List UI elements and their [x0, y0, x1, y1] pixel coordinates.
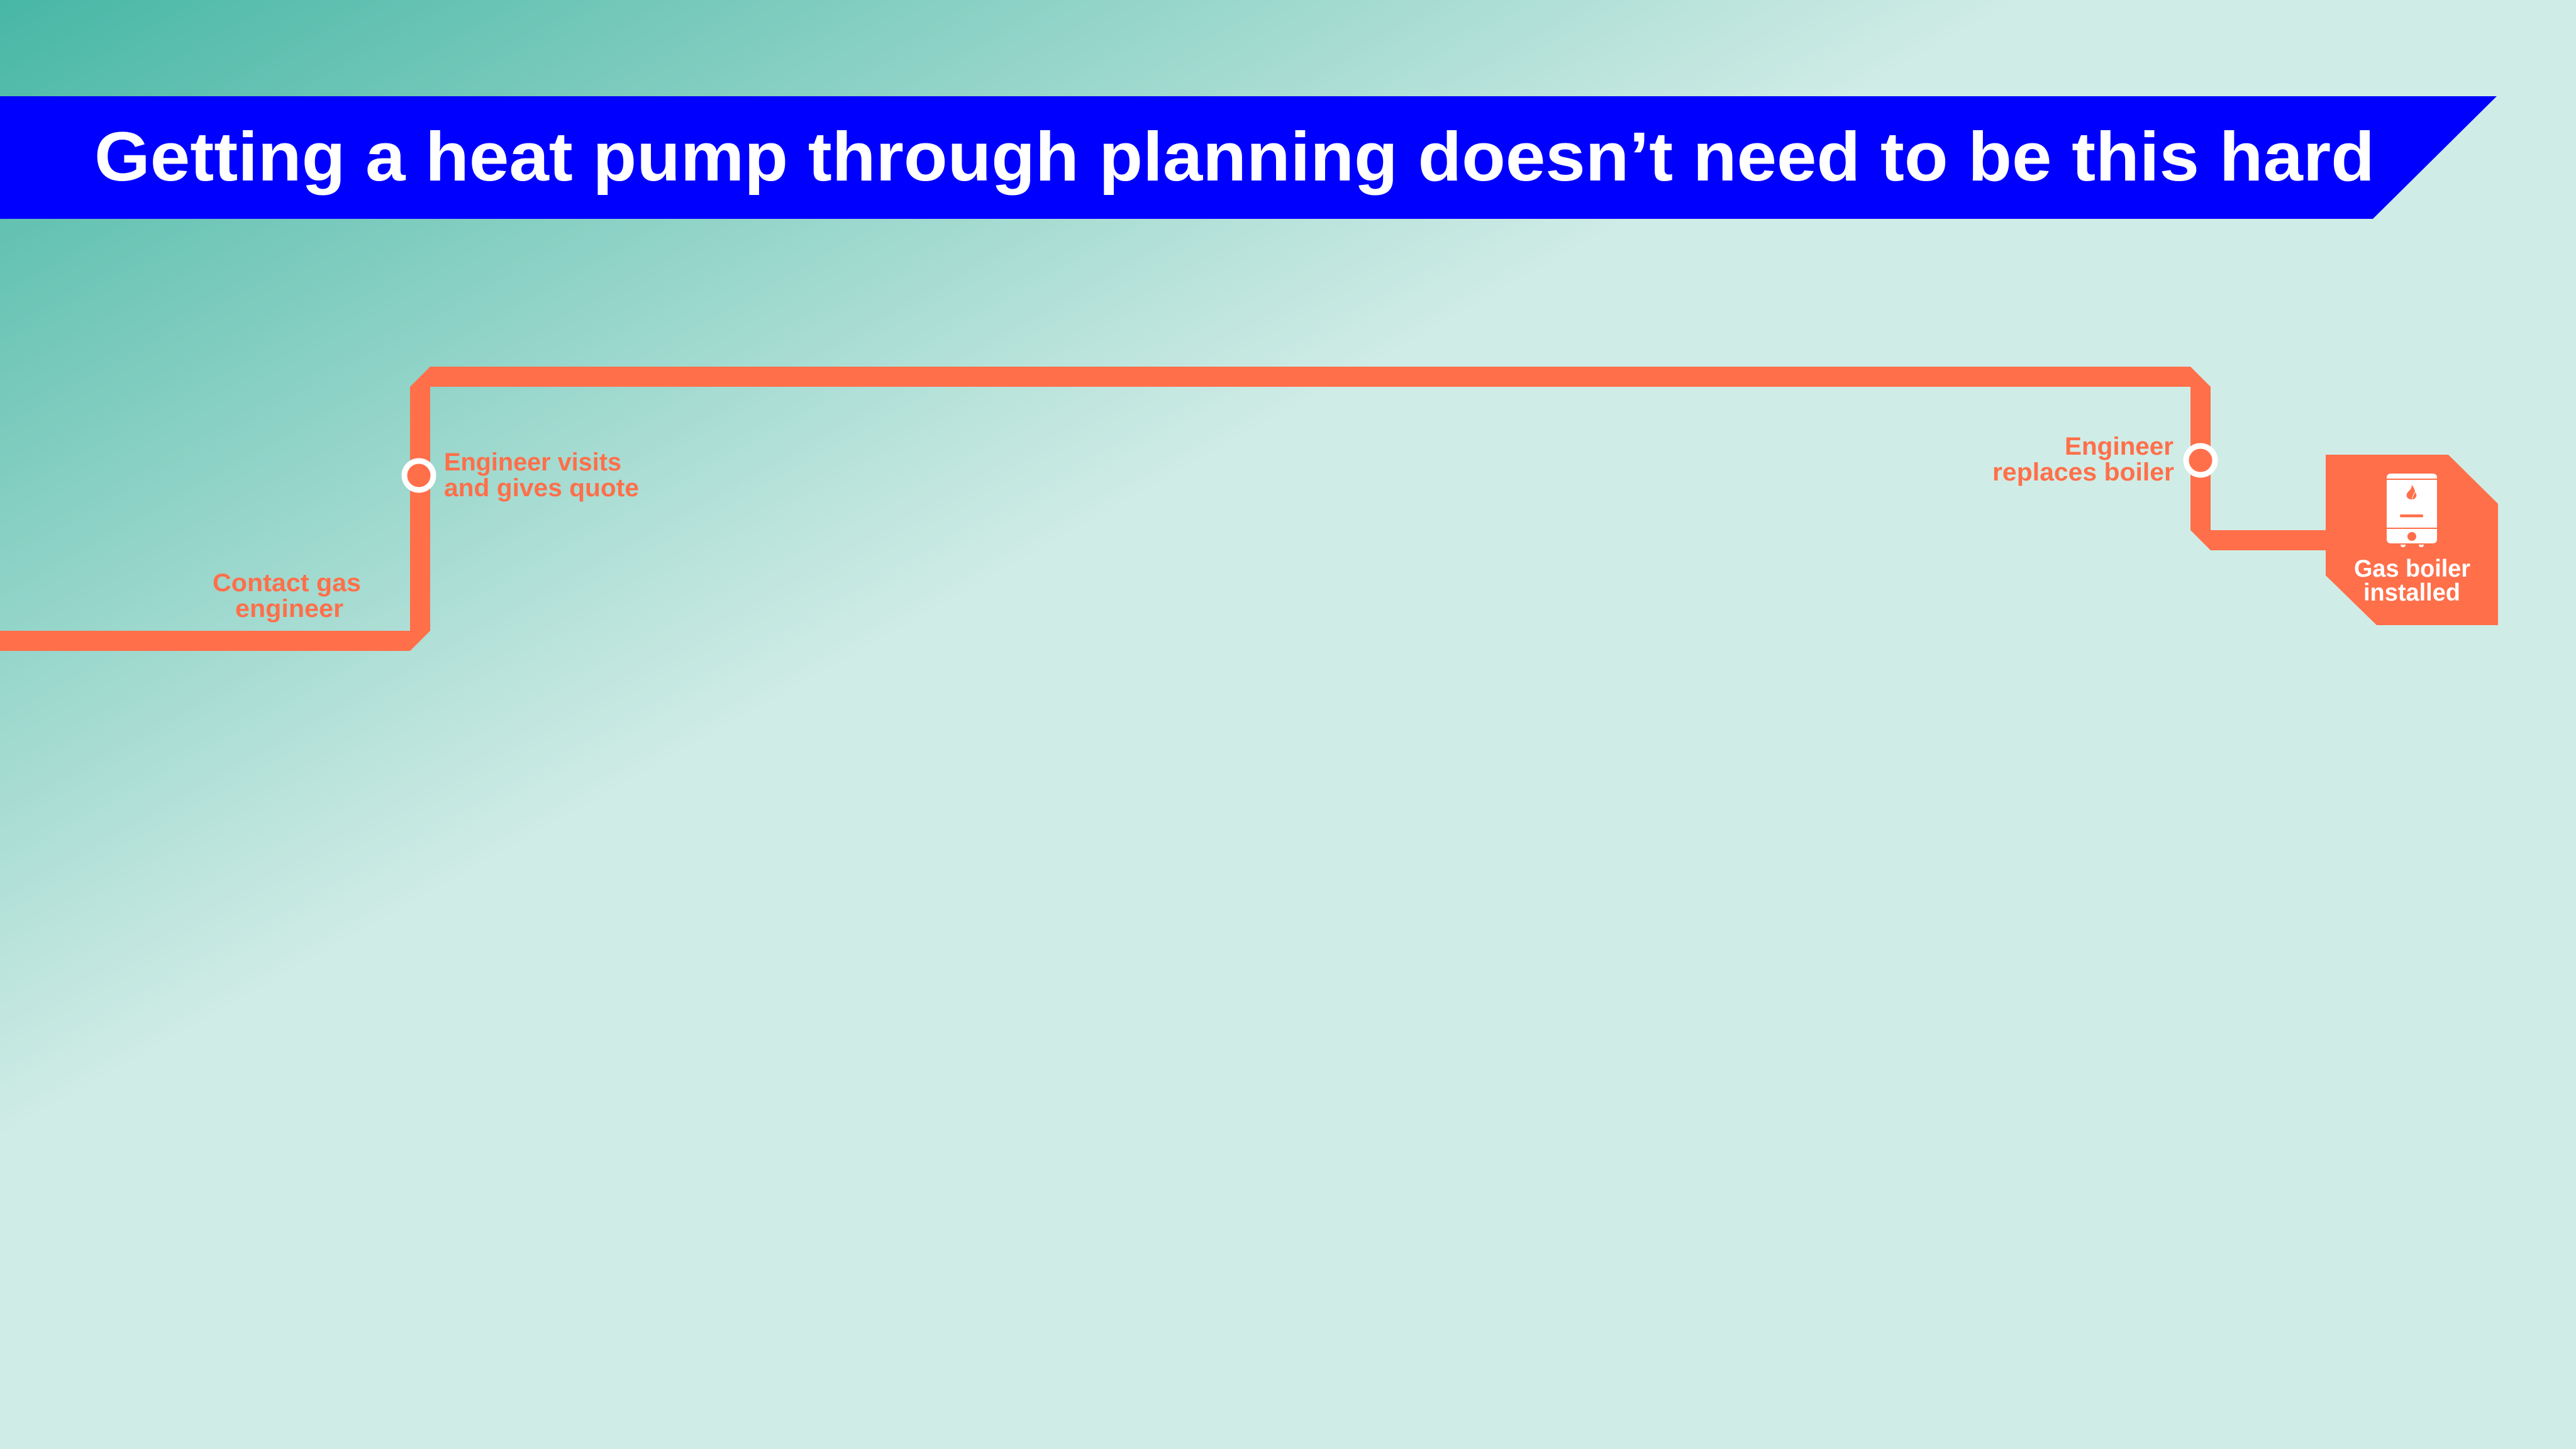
stop marker: [2186, 446, 2215, 475]
end station: gas boiler installed: [2326, 455, 2498, 625]
label: contact gas engineer: Contact gas: [213, 569, 361, 597]
station shape: [2326, 455, 2498, 625]
label: engineer replaces boiler: [1992, 433, 2174, 486]
label: contact gas engineer: engineer: [235, 595, 343, 623]
stop: engineer replaces boiler: [1992, 433, 2215, 486]
route line: gas boiler journey: [0, 367, 2327, 651]
label: engineer replaces boiler: Engineer: [2065, 433, 2174, 460]
stop: contact gas engineer: [213, 569, 361, 623]
icon: gas boiler: [2387, 474, 2437, 547]
station label: Gas boiler: [2354, 555, 2470, 582]
label: engineer visits and gives quote: Engineer visits: [444, 448, 621, 476]
stop marker: [404, 461, 433, 490]
title: Getting a heat pump through planning doesn’t need to be this hard: [94, 118, 2375, 196]
title banner: [0, 96, 2497, 219]
label: engineer visits and gives quote: and gives quote: [444, 474, 639, 502]
label: engineer replaces boiler: replaces boiler: [1992, 458, 2174, 486]
label: contact gas engineer: [213, 569, 361, 623]
station label: [2354, 555, 2470, 606]
label: engineer visits and gives quote: [444, 448, 639, 502]
banner shape: [0, 96, 2497, 219]
station label: installed: [2363, 579, 2460, 606]
stop: engineer visits: [404, 448, 639, 502]
